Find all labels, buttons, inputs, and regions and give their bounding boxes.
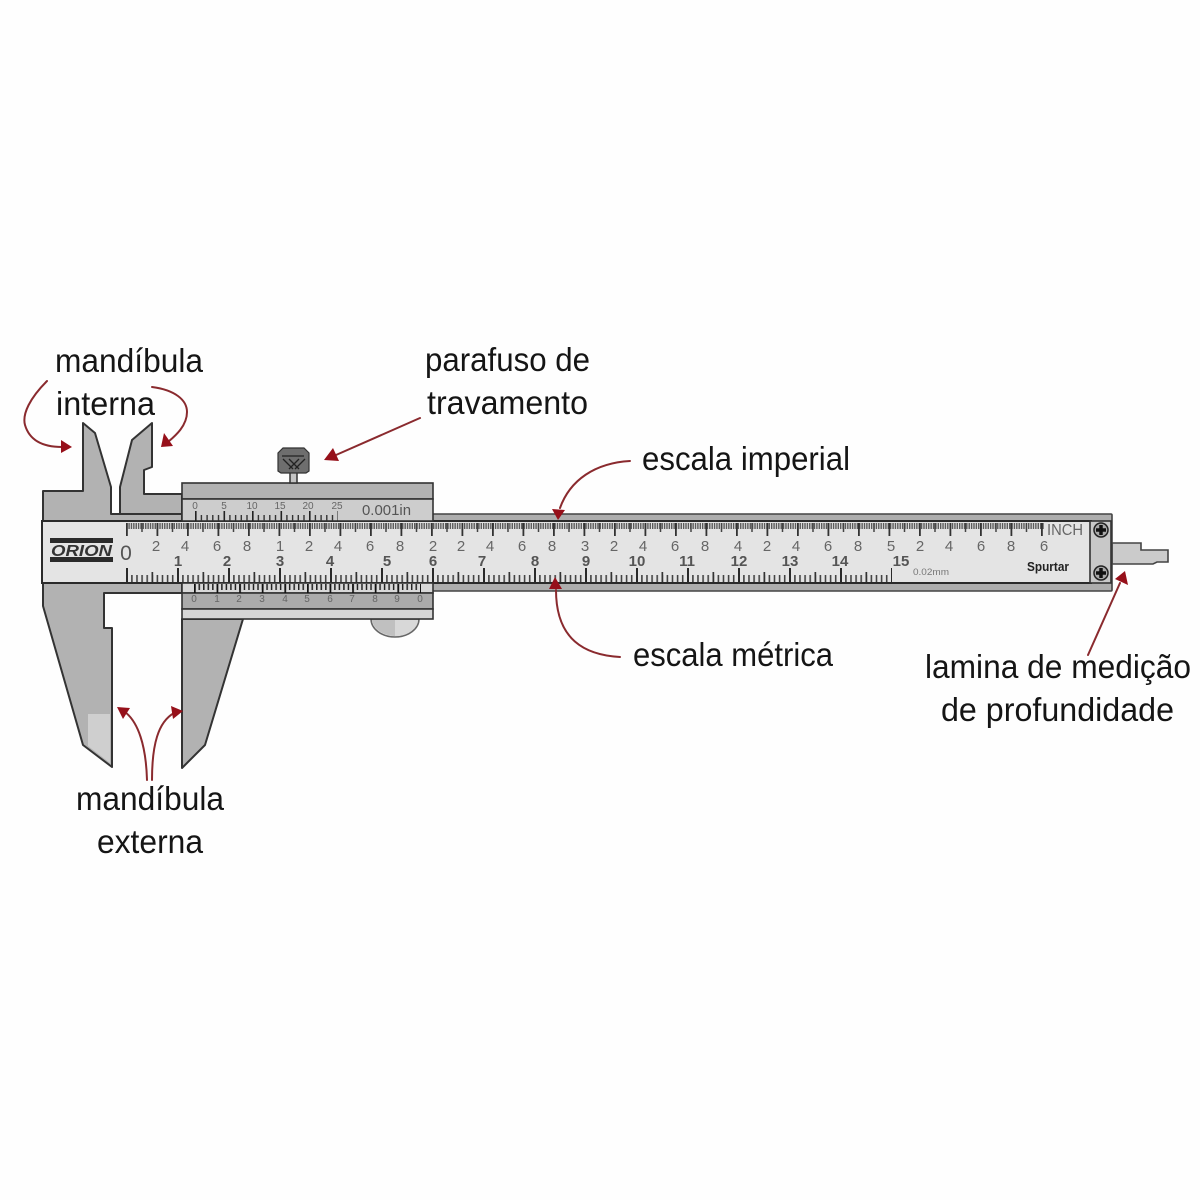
lower vernier numbers xyxy=(191,594,423,605)
arrow: depth blade xyxy=(1088,571,1128,655)
upper vernier numbers: 25 xyxy=(331,501,343,512)
logo: ORION: ORION xyxy=(51,543,113,560)
metric scale numbers: 12 xyxy=(731,553,747,570)
imperial scale numbers: 2 xyxy=(152,538,160,555)
lower vernier numbers: 9 xyxy=(394,594,400,605)
label: lamina de medição de profundidade: de profundidade xyxy=(941,691,1174,728)
lower vernier numbers: 7 xyxy=(349,594,355,605)
metric scale numbers xyxy=(174,553,909,570)
imperial scale numbers: 8 xyxy=(701,538,709,555)
label: parafuso de travamento: parafuso de xyxy=(425,341,590,378)
imperial scale numbers: 4 xyxy=(334,538,342,555)
outer jaw fixed xyxy=(43,583,182,767)
upper vernier numbers: 10 xyxy=(246,501,258,512)
upper vernier numbers: 0 xyxy=(192,501,198,512)
lower vernier numbers: 8 xyxy=(372,594,378,605)
imperial scale numbers: 4 xyxy=(945,538,953,555)
depth blade xyxy=(1112,543,1168,564)
lower vernier numbers: 4 xyxy=(282,594,288,605)
inner jaws upper head xyxy=(43,423,182,521)
metric scale numbers: 11 xyxy=(679,553,695,570)
lower vernier numbers: 0 xyxy=(417,594,423,605)
metric scale numbers: 1 xyxy=(174,553,182,570)
locking screw xyxy=(278,448,309,483)
label: Spurtar: Spurtar xyxy=(1027,559,1069,574)
thumb wheel xyxy=(371,619,419,637)
imperial scale numbers: 6 xyxy=(518,538,526,555)
imperial scale numbers: 3 xyxy=(581,538,589,555)
logo: ORION xyxy=(50,538,113,562)
metric scale numbers: 2 xyxy=(223,553,231,570)
label: mandíbula interna: interna xyxy=(56,385,156,422)
imperial scale numbers: 4 xyxy=(734,538,742,555)
imperial scale numbers: 0 xyxy=(120,542,132,565)
metric scale numbers: 7 xyxy=(478,553,486,570)
upper vernier numbers: 5 xyxy=(221,501,227,512)
lower vernier numbers: 2 xyxy=(236,594,242,605)
imperial scale numbers: 2 xyxy=(457,538,465,555)
upper vernier numbers: 15 xyxy=(274,501,286,512)
lower vernier numbers: 6 xyxy=(327,594,333,605)
lower vernier numbers: 5 xyxy=(304,594,310,605)
imperial scale numbers: 8 xyxy=(243,538,251,555)
imperial scale numbers: 5 xyxy=(887,538,895,555)
label: mandíbula interna: mandíbula xyxy=(55,342,204,379)
imperial scale numbers: 6 xyxy=(824,538,832,555)
metric scale numbers: 14 xyxy=(832,553,849,570)
metric scale numbers: 10 xyxy=(629,553,645,570)
imperial scale numbers: 6 xyxy=(213,538,221,555)
label: mandíbula interna xyxy=(55,342,204,422)
upper vernier numbers xyxy=(192,501,343,512)
metric scale numbers: 15 xyxy=(893,553,909,570)
imperial scale numbers: 4 xyxy=(639,538,647,555)
lower vernier ticks xyxy=(194,584,421,593)
imperial scale numbers: 4 xyxy=(486,538,494,555)
arrow: escala imperial xyxy=(552,461,630,520)
label: escala imperial: escala imperial xyxy=(642,440,850,477)
upper vernier numbers: 20 xyxy=(302,501,314,512)
imperial scale numbers xyxy=(120,538,1048,565)
label: 0.02mm: 0.02mm xyxy=(913,567,949,577)
metric scale numbers: 3 xyxy=(276,553,284,570)
arrow: interna right xyxy=(152,387,187,447)
imperial scale numbers: 4 xyxy=(792,538,800,555)
outer jaw moving xyxy=(182,619,243,768)
imperial scale numbers: 2 xyxy=(763,538,771,555)
label: INCH: INCH xyxy=(1047,522,1083,539)
lower vernier numbers: 1 xyxy=(214,594,220,605)
caliper xyxy=(42,423,1168,768)
label: 0.001in: 0.001in xyxy=(362,502,411,519)
label: mandíbula externa: externa xyxy=(97,823,204,860)
imperial scale numbers: 6 xyxy=(366,538,374,555)
arrow: locking screw xyxy=(324,418,420,461)
metric scale numbers: 9 xyxy=(582,553,590,570)
lower vernier numbers: 0 xyxy=(191,594,197,605)
imperial scale ticks xyxy=(126,523,1044,536)
metric scale numbers: 8 xyxy=(531,553,539,570)
arrow: mandíbula externa left xyxy=(117,707,147,780)
upper vernier ticks xyxy=(195,511,338,521)
label: parafuso de travamento: travamento xyxy=(427,384,588,421)
imperial scale numbers: 6 xyxy=(1040,538,1048,555)
end plate with screws xyxy=(1090,521,1111,583)
imperial scale numbers: 8 xyxy=(1007,538,1015,555)
imperial scale numbers: 1 xyxy=(276,538,284,555)
metric scale numbers: 5 xyxy=(383,553,391,570)
metric scale numbers: 6 xyxy=(429,553,437,570)
imperial scale numbers: 8 xyxy=(396,538,404,555)
metric scale numbers: 4 xyxy=(326,553,335,570)
label: mandíbula externa xyxy=(76,780,225,860)
label: mandíbula externa: mandíbula xyxy=(76,780,225,817)
arrow: mandíbula externa right xyxy=(152,706,183,780)
main beam xyxy=(42,514,1112,591)
label: escala métrica: escala métrica xyxy=(633,636,834,673)
arrow: interna left xyxy=(24,381,72,453)
imperial scale numbers: 2 xyxy=(916,538,924,555)
imperial scale numbers: 8 xyxy=(548,538,556,555)
imperial scale numbers: 2 xyxy=(610,538,618,555)
imperial scale numbers: 4 xyxy=(181,538,189,555)
imperial scale numbers: 2 xyxy=(305,538,313,555)
imperial scale numbers: 8 xyxy=(854,538,862,555)
label: lamina de medição de profundidade: lamina de medição xyxy=(925,648,1191,685)
arrow: escala métrica xyxy=(549,577,620,657)
label: lamina de medição de profundidade xyxy=(925,648,1191,728)
imperial scale numbers: 6 xyxy=(977,538,985,555)
metric scale ticks xyxy=(126,568,892,582)
imperial scale numbers: 6 xyxy=(671,538,679,555)
label: parafuso de travamento xyxy=(425,341,590,421)
lower vernier numbers: 3 xyxy=(259,594,265,605)
imperial scale numbers: 2 xyxy=(429,538,437,555)
metric scale numbers: 13 xyxy=(782,553,798,570)
slider xyxy=(182,483,433,619)
